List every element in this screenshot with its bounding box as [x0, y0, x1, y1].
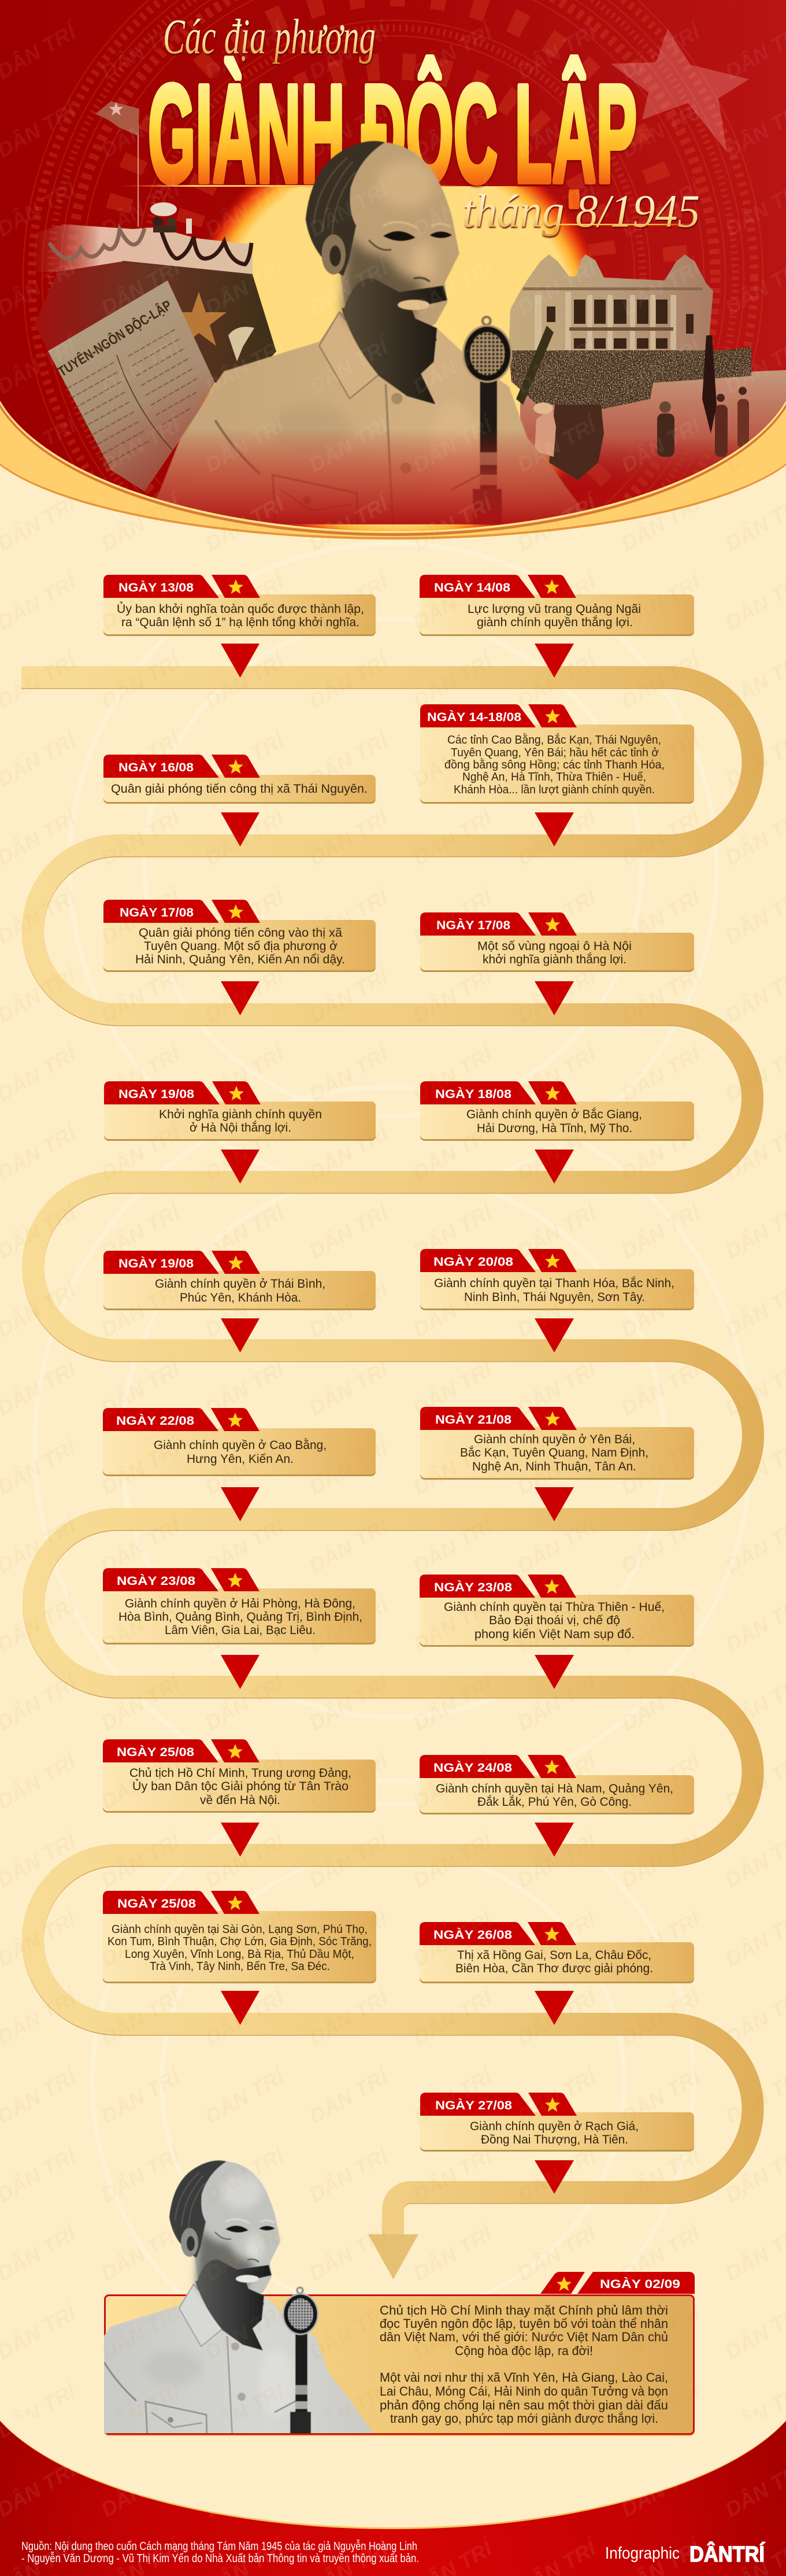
brand: infographic Dân Trí — [605, 2541, 765, 2567]
opera house photo — [509, 254, 786, 497]
card: ngày 27/08: Đồng Nai Thượng, Hà Tiên. — [481, 2133, 628, 2146]
card: ngày 23/08 right: NGÀY 23/08 — [434, 1581, 512, 1594]
arrows row 3 — [221, 981, 574, 1015]
card: ngày 17/08 right — [420, 912, 694, 972]
second paragraph: tranh gay go, phức tạp mới giành được thắng lợi. — [390, 2411, 658, 2426]
card: ngày 25/08 upper: về đến Hà Nội. — [200, 1794, 280, 1807]
card: ngày 16/08 — [103, 755, 376, 804]
first paragraph: dân Việt Nam, với thế giới: Nước Việt Nam Dân chủ — [380, 2330, 668, 2344]
card: ngày 25/08 lower: Long Xuyên, Vĩnh Long, Bà Rịa, Thủ Dầu Một, — [125, 1948, 354, 1961]
card: ngày 26/08: Biên Hòa, Cần Thơ được giải phóng. — [455, 1962, 653, 1975]
card: ngày 25/08 upper — [103, 1739, 376, 1813]
card: ngày 22/08: Hưng Yên, Kiến An. — [187, 1453, 294, 1466]
card: ngày 17/08 left: Hải Ninh, Quảng Yên, Kiến An nổi dậy. — [135, 953, 345, 966]
card: ngày 17/08 right: NGÀY 17/08 — [436, 919, 510, 932]
newspaper: Tuyên ngôn độc lập: TUYÊN-NGÔN ĐỘC-LẬP — [55, 297, 175, 380]
arrows row 8 — [221, 1823, 574, 1857]
arrows row 7 — [221, 1655, 574, 1689]
card: ngày 27/08: Giành chính quyền ở Rạch Giá, — [470, 2120, 639, 2133]
arrows row 2 — [221, 812, 574, 847]
brand: infographic Dân Trí: Infographic — [605, 2544, 680, 2563]
card: ngày 25/08 upper: Ủy ban Dân tộc Giải phóng từ Tân Trào — [132, 1779, 348, 1793]
arrows row 1 — [221, 644, 574, 678]
card: ngày 21/08 — [420, 1407, 694, 1480]
card: ngày 18/08: Giành chính quyền ở Bắc Giang, — [466, 1108, 642, 1121]
card: ngày 17/08 left: Quân giải phóng tiến công vào thị xã — [139, 926, 342, 940]
drum pattern rings — [23, 0, 763, 507]
card: ngày 23/08 left: NGÀY 23/08 — [117, 1575, 195, 1588]
card: ngày 19/08 top — [104, 1081, 376, 1141]
card: ngày 19/08 top: ở Hà Nội thắng lợi. — [190, 1121, 291, 1134]
card: ngày 20/08: Giành chính quyền tại Thanh Hóa, Bắc Ninh, — [434, 1277, 674, 1290]
card: ngày 25/08 lower: Trà Vinh, Tây Ninh, Bến Tre, Sa Đéc. — [150, 1960, 330, 1973]
card: ngày 24/08: NGÀY 24/08 — [433, 1761, 512, 1775]
arrows row 9 — [221, 1991, 574, 2025]
title script line: Các địa phương — [163, 9, 376, 64]
card: ngày 17/08 right: khởi nghĩa giành thắng lợi. — [483, 953, 626, 966]
card: ngày 19/08 lower: Giành chính quyền ở Thái Bình, — [155, 1277, 325, 1291]
final card: ngày 02/09 — [104, 2272, 695, 2436]
card: ngày 21/08: Nghệ An, Ninh Thuận, Tân An. — [472, 1460, 636, 1473]
arrow last — [535, 2160, 574, 2194]
card: ngày 19/08 lower: Phúc Yên, Khánh Hòa. — [180, 1291, 301, 1304]
footer: red band — [0, 2368, 786, 2576]
newspaper: Tuyên ngôn độc lập — [48, 280, 215, 491]
card: ngày 13/08: Ủy ban khởi nghĩa toàn quốc được thành lập, — [117, 602, 364, 616]
card: ngày 14-18/08: Nghệ An, Hà Tĩnh, Thừa Thiên - Huế, — [462, 771, 646, 783]
arrows row 5 — [221, 1318, 574, 1352]
arrows row 6 — [221, 1487, 574, 1521]
card: ngày 23/08 left: Lâm Viên, Gia Lai, Bạc Liêu. — [165, 1624, 316, 1637]
first paragraph: Cộng hòa độc lập, ra đời! — [455, 2344, 593, 2358]
card: ngày 19/08 top: Khởi nghĩa giành chính quyền — [159, 1108, 322, 1121]
second paragraph: Một vài nơi như thị xã Vĩnh Yên, Hà Giang, Lào Cai, — [380, 2370, 668, 2385]
card: ngày 19/08 lower: NGÀY 19/08 — [118, 1257, 194, 1270]
date line: tháng 8/1945 — [462, 186, 700, 237]
card: ngày 21/08: Giành chính quyền ở Yên Bái, — [474, 1433, 635, 1446]
card: ngày 14-18/08 — [420, 704, 694, 804]
card: ngày 24/08 — [420, 1755, 694, 1814]
card: ngày 26/08 — [420, 1922, 694, 1983]
card: ngày 25/08 lower: Kon Tum, Bình Thuận, Chợ Lớn, Gia Định, Sóc Trăng, — [107, 1935, 372, 1948]
card: ngày 18/08 — [420, 1081, 694, 1141]
red watermark in footer — [0, 2426, 786, 2576]
card: ngày 24/08: Đắk Lắk, Phú Yên, Gò Công. — [477, 1795, 632, 1809]
card: ngày 23/08 right: Bảo Đại thoái vị, chế độ — [489, 1614, 620, 1627]
tribune photo — [35, 202, 276, 383]
card: ngày 22/08: Giành chính quyền ở Cao Bằng, — [154, 1439, 327, 1452]
winding ribbon timeline — [21, 677, 753, 2235]
flag on pole — [95, 101, 139, 227]
card: ngày 19/08 top: NGÀY 19/08 — [118, 1088, 194, 1101]
header: red circular banner — [0, 0, 786, 539]
card: ngày 17/08 right: Một số vùng ngoại ô Hà Nội — [477, 940, 632, 953]
first paragraph — [380, 2303, 668, 2358]
card: ngày 14-18/08: Khánh Hòa... lần lượt giành chính quyền. — [454, 783, 655, 796]
date label: NGÀY 02/09 — [600, 2278, 680, 2291]
card: ngày 26/08: NGÀY 26/08 — [433, 1928, 512, 1942]
second paragraph: phản động chống lại nên sau một thời gian dài đấu — [380, 2398, 668, 2412]
card: ngày 14-18/08: Các tỉnh Cao Bằng, Bắc Kạn, Thái Nguyên, — [447, 733, 661, 746]
Ho Chi Minh portrait sepia — [147, 141, 591, 524]
first paragraph: đọc Tuyên ngôn độc lập, tuyên bố với toàn thể nhân — [380, 2316, 668, 2331]
card: ngày 25/08 lower — [103, 1891, 376, 1983]
card: ngày 20/08: NGÀY 20/08 — [433, 1255, 513, 1269]
card: ngày 14/08: NGÀY 14/08 — [434, 581, 510, 594]
card: ngày 25/08 lower: NGÀY 25/08 — [117, 1897, 196, 1910]
white watermark in header — [0, 0, 786, 544]
card: ngày 21/08: Bắc Kạn, Tuyên Quang, Nam Định, — [460, 1446, 648, 1459]
card: ngày 21/08: NGÀY 21/08 — [435, 1413, 511, 1426]
card: ngày 23/08 left — [103, 1568, 376, 1644]
red panel — [0, 0, 786, 531]
first paragraph: Chủ tịch Hồ Chí Minh thay mặt Chính phủ lâm thời — [380, 2303, 668, 2318]
card: ngày 18/08: Hải Dương, Hà Tĩnh, Mỹ Tho. — [477, 1122, 632, 1135]
sun — [196, 186, 594, 531]
card: ngày 14-18/08: Tuyên Quang, Yên Bái; hầu hết các tỉnh ở — [451, 746, 659, 759]
card: ngày 14/08: giành chính quyền thắng lợi. — [477, 616, 633, 629]
translucent flag star — [611, 29, 749, 152]
source note: - Nguyễn Văn Dương - Vũ Thị Kim Yến do Nhà Xuất bản Thông tin và truyền thông xuất bản. — [21, 2552, 419, 2565]
Ho Chi Minh portrait grey — [104, 2160, 373, 2433]
card: ngày 24/08: Giành chính quyền tại Hà Nam, Quảng Yên, — [436, 1782, 673, 1795]
card: ngày 17/08 left: NGÀY 17/08 — [120, 906, 194, 919]
cream watermark — [0, 463, 786, 2417]
card: ngày 27/08: NGÀY 27/08 — [435, 2099, 512, 2112]
card: ngày 23/08 right — [420, 1575, 694, 1647]
date label — [540, 2272, 695, 2294]
source note — [21, 2540, 419, 2565]
card: ngày 14-18/08: NGÀY 14-18/08 — [427, 711, 521, 724]
card: ngày 13/08 — [103, 575, 376, 636]
card: ngày 23/08 right: Giành chính quyền tại Thừa Thiên - Huế, — [444, 1601, 665, 1614]
card: ngày 27/08 — [420, 2093, 694, 2152]
card: ngày 25/08 upper: NGÀY 25/08 — [117, 1746, 194, 1759]
card: ngày 19/08 lower — [103, 1251, 376, 1310]
second paragraph: Lai Châu, Móng Cái, Hải Ninh do quân Tưởng và bọn — [380, 2384, 668, 2398]
card: ngày 20/08: Ninh Bình, Thái Nguyên, Sơn Tây. — [464, 1291, 645, 1304]
card: ngày 23/08 right: phong kiến Việt Nam sụp đổ. — [474, 1628, 635, 1641]
card: ngày 13/08: NGÀY 13/08 — [118, 581, 194, 594]
card: ngày 17/08 left: Tuyên Quang. Một số địa phương ở — [144, 940, 338, 953]
card: ngày 16/08: Quân giải phóng tiến công thị xã Thái Nguyên. — [111, 782, 368, 796]
card: ngày 16/08: NGÀY 16/08 — [118, 761, 194, 774]
card: ngày 18/08: NGÀY 18/08 — [435, 1088, 511, 1101]
card: ngày 26/08: Thị xã Hồng Gai, Sơn La, Châu Đốc, — [457, 1949, 651, 1962]
card: ngày 25/08 lower: Giành chính quyền tại Sài Gòn, Lạng Sơn, Phú Thọ, — [112, 1923, 368, 1936]
source note: Nguồn: Nội dung theo cuốn Cách mạng tháng Tám Năm 1945 của tác giả Nguyễn Hoàng Linh — [21, 2540, 417, 2553]
card: ngày 22/08 — [103, 1408, 376, 1476]
card: ngày 14/08: Lực lượng vũ trang Quảng Ngãi — [468, 603, 641, 616]
second paragraph — [380, 2370, 668, 2426]
arrows row 4 — [221, 1150, 574, 1184]
card: ngày 22/08: NGÀY 22/08 — [116, 1414, 194, 1428]
card: ngày 13/08: ra “Quân lệnh số 1” hạ lệnh tổng khởi nghĩa. — [121, 616, 359, 629]
card: ngày 23/08 left: Hòa Bình, Quảng Bình, Quảng Trị, Bình Định, — [118, 1610, 362, 1624]
gold final arrow — [368, 2234, 418, 2279]
card: ngày 14/08 — [420, 575, 694, 636]
card: ngày 25/08 upper: Chủ tịch Hồ Chí Minh, Trung ương Đảng, — [129, 1766, 351, 1780]
card: ngày 17/08 left — [103, 900, 376, 972]
card: ngày 20/08 — [420, 1249, 694, 1310]
gold rim — [0, 0, 786, 539]
brand: infographic Dân Trí: DÂNTRÍ — [689, 2541, 765, 2567]
card: ngày 23/08 left: Giành chính quyền ở Hải Phòng, Hà Đông, — [125, 1597, 355, 1610]
card: ngày 14-18/08: đồng bằng sông Hồng; các tỉnh Thanh Hóa, — [444, 758, 665, 771]
title glow line — [121, 185, 468, 187]
